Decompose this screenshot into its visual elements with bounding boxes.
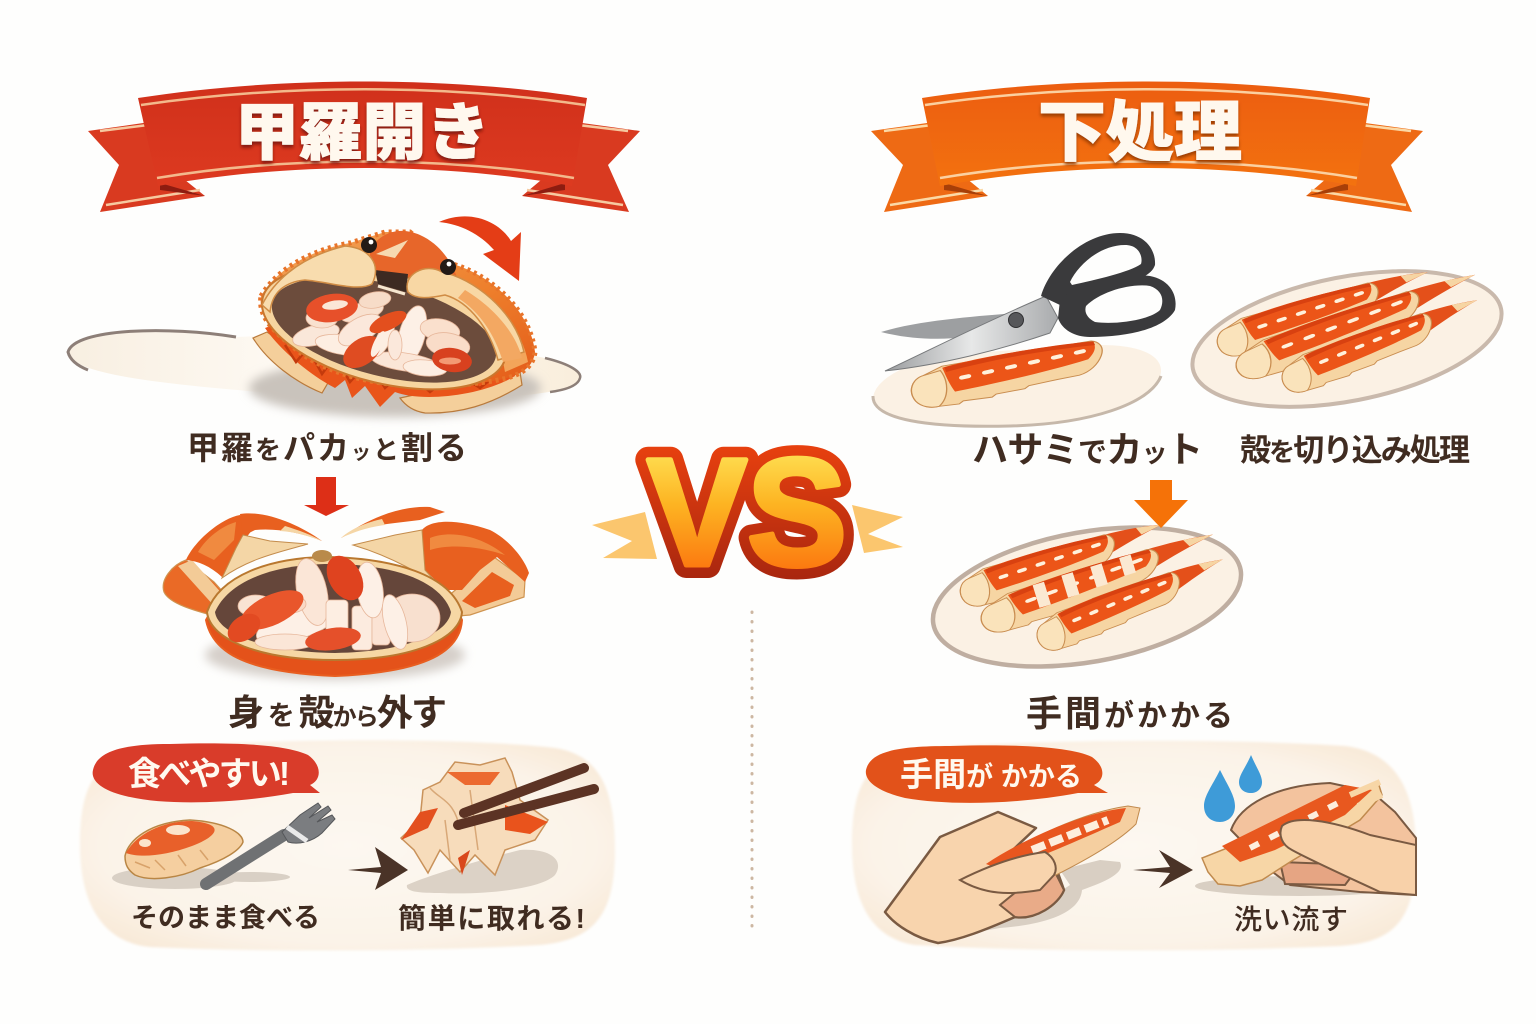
- chopsticks: [458, 768, 594, 825]
- shell rim: [249, 244, 519, 412]
- plate left: [873, 345, 1161, 427]
- panel: 食べやすい: [80, 740, 615, 951]
- caption: ハサミでカット: ハサミでカット: [972, 429, 1203, 470]
- right claw: [341, 507, 529, 617]
- crab meat piece: [112, 820, 243, 889]
- meat shadow: [407, 850, 558, 893]
- scissor pivot: [1008, 312, 1024, 328]
- arrow: [348, 847, 408, 890]
- plate: [1181, 248, 1513, 430]
- arrow: [1133, 850, 1193, 888]
- caption left: そのまま食べる: [131, 903, 320, 933]
- caption: 手間がかかる: 手間がかかる: [1026, 693, 1233, 734]
- thumb: [960, 852, 1056, 893]
- speech bubble: [93, 743, 320, 802]
- crab head: [370, 231, 458, 280]
- left claw: [163, 513, 322, 618]
- panel background: [852, 741, 1416, 950]
- ribbon body left banner: [138, 82, 587, 186]
- fork: [206, 803, 335, 884]
- bubble text: 食べやすい!: [128, 755, 290, 792]
- plate shadow: [205, 630, 465, 680]
- legs: [1212, 266, 1436, 361]
- panel background: [80, 740, 615, 951]
- crab leg on plate: [908, 338, 1107, 411]
- caption right: 簡単に取れる!: [398, 903, 585, 934]
- face lobes: [262, 246, 376, 312]
- caption: 洗い流す: [1234, 904, 1348, 935]
- cut leg: [975, 529, 1223, 638]
- eyes: [361, 237, 456, 275]
- scissor handles: [1041, 233, 1176, 337]
- bubble text: 手間が かかる: [900, 756, 1082, 793]
- panel: 手間がかかる: [852, 741, 1416, 950]
- banner: 下処理: [871, 82, 1423, 212]
- title 下処理: 下処理: [1038, 95, 1242, 169]
- lower shell: [253, 315, 522, 413]
- flaked crab meat: [401, 758, 548, 875]
- caption: 甲羅をパカッと割る: 甲羅をパカッと割る: [187, 430, 467, 466]
- arrow: orange down: [1134, 480, 1188, 528]
- table ellipse: [68, 330, 580, 398]
- interior: [215, 564, 451, 653]
- caption: 身を殻から外す: 身 を 殻から外す: [228, 692, 447, 733]
- plate: [922, 506, 1252, 688]
- illustration: plate with three legs: [1181, 248, 1513, 430]
- VS fill: VS: [647, 427, 847, 598]
- orange shell base: [206, 566, 462, 676]
- arrow: curved opening arrow: [439, 216, 521, 281]
- water drop small: [1239, 755, 1262, 793]
- caption: 殻を切り込み処理: 殻を切り込み処理: [1240, 433, 1470, 468]
- ribbon body right banner: [922, 82, 1370, 186]
- back hand: [1231, 783, 1416, 895]
- crab leg right: [1202, 782, 1382, 886]
- speech bubble: [866, 745, 1108, 803]
- leg shadow: [1195, 876, 1405, 896]
- banner: 甲羅開き: [88, 82, 640, 212]
- shell shadow: [249, 359, 541, 417]
- lower fingers: [1280, 862, 1360, 885]
- ribbon tails left banner: [88, 122, 640, 212]
- hand holding leg: [885, 806, 1140, 943]
- upper shell back: [261, 232, 535, 386]
- scissor blades: [881, 296, 1058, 371]
- dotted divider: [750, 612, 754, 930]
- crab meat: [290, 289, 472, 378]
- mouth gap: [375, 270, 408, 292]
- VS outline: VS: [647, 427, 847, 598]
- VS badge: [592, 427, 903, 598]
- arrow: red down: [304, 477, 349, 516]
- legs: [955, 519, 1170, 611]
- water drop large: [1204, 770, 1235, 822]
- illustration: scissors and leg on plate: [873, 233, 1176, 427]
- illustration: plate with cut legs: [922, 506, 1252, 688]
- thumb right: [1280, 820, 1416, 895]
- ribbon tails right banner: [871, 122, 1423, 212]
- side flags: [592, 512, 657, 559]
- crab leg in hand: [988, 806, 1140, 875]
- meat pile: [238, 556, 440, 653]
- cream rim: [207, 557, 462, 660]
- title 甲羅開き: 甲羅開き: [235, 99, 490, 168]
- illustration: crab shell opening: [68, 231, 580, 417]
- illustration: open crab with claws: [163, 507, 529, 680]
- hand shadow: [960, 860, 1121, 935]
- shell interior: [261, 258, 507, 402]
- shell right texture: [462, 288, 528, 372]
